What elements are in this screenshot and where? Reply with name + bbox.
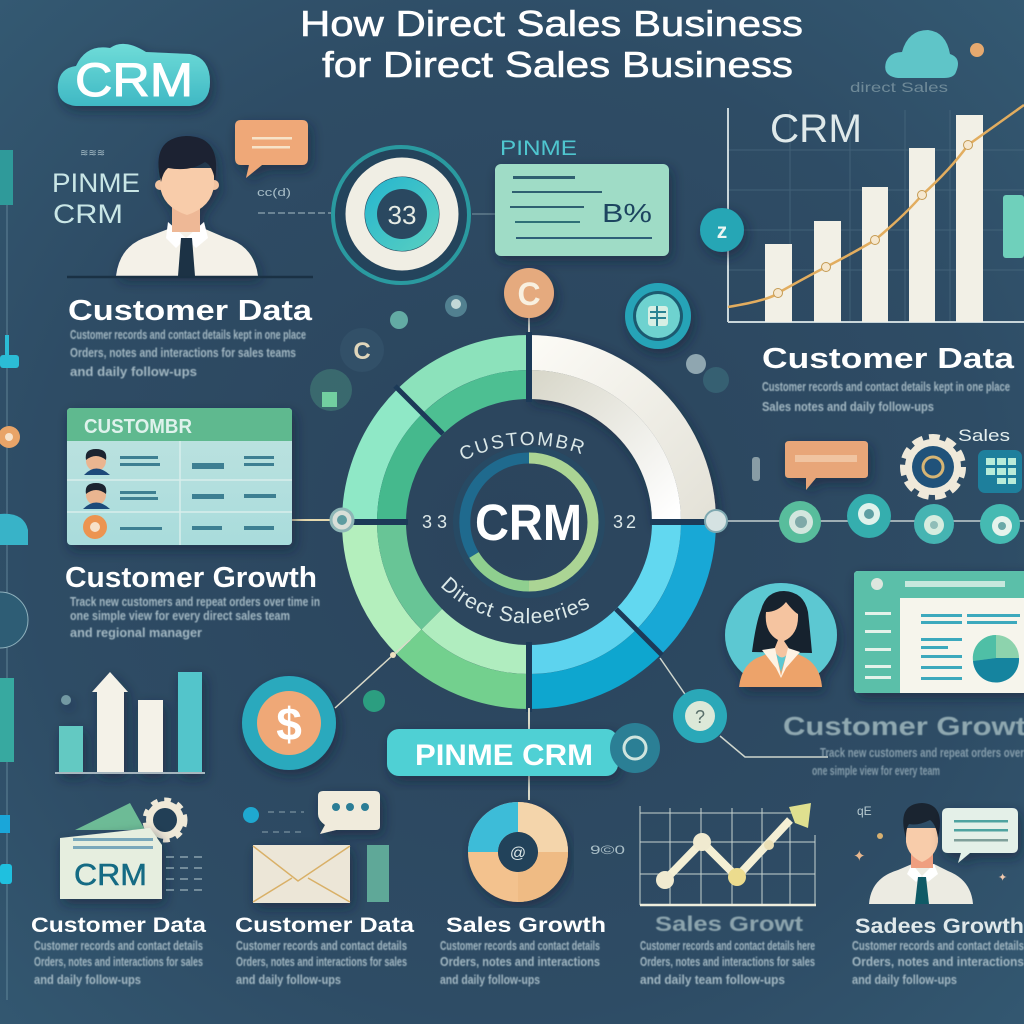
title: for Direct Sales Business: [322, 44, 793, 85]
PINME card: B%: [602, 198, 652, 228]
heading: Customer Data right: Customer Data: [762, 343, 1015, 375]
body text bottom 1: and daily follow-ups: [34, 973, 141, 987]
icon: businessman bottom right with bubble: [853, 803, 1018, 904]
icon: businessman bottom right with bubble: qE: [857, 804, 872, 818]
icon: envelope with chat bubble: [243, 791, 389, 903]
icon: CRM folder with gear: CRM: [74, 857, 147, 892]
ring: top-left green segment: [359, 352, 529, 522]
body text: customer data right: [762, 380, 1010, 414]
left edge strip of icons: [0, 150, 28, 1000]
line chart with arrow: [640, 803, 816, 905]
body text sales growth: Customer records and contact details: [440, 939, 600, 953]
body text bottom 1: [34, 939, 203, 987]
heading: Customer Data left: Customer Data: [68, 295, 313, 327]
PINME CRM label: [52, 148, 140, 229]
body text faded: [640, 939, 815, 987]
donut chart bottom: @: [510, 845, 526, 862]
PINME CRM label: ≋≋≋: [80, 148, 105, 159]
connector nodes left and right of ring: [292, 509, 1024, 532]
body text: customer data: [70, 328, 306, 379]
floating small icons: C: [353, 338, 371, 365]
body text sadees growth: and daily follow-ups: [852, 973, 957, 987]
small label beside donut: 9©0: [590, 843, 625, 857]
teal circle icon on chart axis: [700, 208, 744, 252]
teal circle icon upper right: [625, 283, 691, 349]
ring: bottom-left green segment: [359, 522, 529, 692]
PINME CRM label: CRM: [53, 199, 123, 229]
dollar coin icon: [242, 676, 336, 770]
ring numbers: [422, 512, 636, 532]
small bar chart: [55, 672, 205, 773]
inner gauge ring: [457, 450, 601, 594]
body text: customer growth: one simple view for every direct sales team: [70, 609, 290, 623]
body text sales growth: Orders, notes and interactions: [440, 955, 600, 969]
CRM cloud badge: [58, 44, 210, 106]
center label CRM: CRM: [475, 494, 582, 551]
body text: growth right: one simple view for every team: [812, 764, 940, 778]
right cluster: speech bubble, gear, sales: Sales: [958, 426, 1010, 445]
customer table card: [67, 408, 292, 545]
donut chart bottom: [483, 817, 553, 887]
body text: growth right: [812, 746, 1024, 778]
bar chart top right: [728, 105, 1024, 322]
body text: customer growth: and regional manager: [70, 626, 202, 640]
body text: customer data right: Sales notes and daily follow-ups: [762, 400, 934, 414]
icon: businessman bottom right with bubble: ✦: [853, 848, 866, 865]
body text bottom 2: Orders, notes and interactions for sales: [236, 955, 407, 969]
customer table card: CUSTOMBR: [84, 416, 193, 438]
body text sales growth: and daily follow-ups: [440, 973, 540, 987]
teal card at right edge: [1003, 195, 1024, 258]
connector dollar to ring: [335, 640, 410, 712]
title: How Direct Sales Business: [300, 3, 803, 44]
PINME CRM pill: PINME CRM: [415, 739, 593, 772]
dollar coin icon: $: [276, 698, 302, 750]
body text bottom 2: [236, 939, 407, 987]
icon: businessman: [116, 136, 258, 276]
node circles on right line: [779, 494, 1020, 544]
ring: bottom-right blue segment: [529, 522, 698, 692]
PINME CRM label: PINME: [52, 168, 140, 198]
teal circle icon on chart axis: z: [717, 220, 727, 243]
body text: customer growth: [70, 595, 320, 640]
body text: customer data: Orders, notes and interactions for sales teams: [70, 346, 296, 360]
body text faded: Customer records and contact details here: [640, 939, 815, 953]
right cluster: speech bubble, gear, sales: [752, 426, 1022, 495]
ring numbers: 33: [422, 512, 447, 532]
body text bottom 2: Customer records and contact details: [236, 939, 407, 953]
body text bottom 1: Orders, notes and interactions for sales: [34, 955, 203, 969]
baseline under businessman: [67, 276, 313, 278]
connector question circle: [660, 658, 828, 757]
PINME CRM pill: [387, 708, 660, 800]
cloud icon top right: [850, 30, 984, 95]
body text: customer data: and daily follow-ups: [70, 365, 197, 379]
donut gauge icon: 33: [388, 200, 416, 230]
heading: Sadees Growth: Sadees Growth: [855, 915, 1024, 938]
body text bottom 2: and daily follow-ups: [236, 973, 341, 987]
body text: customer data: Customer records and contact details kept in one place: [70, 328, 306, 342]
bar chart top right: CRM: [770, 107, 862, 151]
CRM cloud badge: CRM: [75, 53, 193, 106]
cloud icon top right: direct Sales: [850, 79, 948, 95]
connector from businessman to gauge: [258, 212, 331, 214]
ring: top-right white segment: [529, 352, 698, 522]
curved label direct sales: Direct Saleeries: [441, 576, 589, 624]
body text: customer growth: Track new customers and repeat orders over time in: [70, 595, 320, 609]
curved label customer: CUSTOMBR: [460, 432, 584, 459]
body text faded: and daily team follow-ups: [640, 973, 785, 987]
icon: businessman bottom right with bubble: ✦: [998, 872, 1007, 884]
donut gauge icon: [333, 147, 469, 283]
ring numbers: 32: [613, 512, 636, 532]
heading: Customer Data bottom 1: Customer Data: [31, 914, 206, 937]
connector question circle: ?: [695, 707, 705, 727]
body text bottom 1: Customer records and contact details: [34, 939, 203, 953]
floating small icons: [310, 295, 729, 411]
connector top node: C: [517, 276, 541, 312]
icon: CRM folder with gear: [60, 801, 203, 899]
dashboard card right: [854, 571, 1024, 693]
icon: woman avatar: [725, 583, 837, 687]
speech bubble orange: [235, 120, 308, 178]
PINME card: [472, 137, 669, 256]
connector top node: [504, 268, 554, 336]
PINME card: PINME: [500, 137, 577, 160]
heading: Customer Data bottom 2: Customer Data: [235, 914, 414, 937]
central CRM ring chart: [342, 332, 723, 712]
heading: Sales Growth bottom: Sales Growth: [446, 914, 606, 937]
body text sales growth: [440, 939, 600, 987]
heading: Customer Growth left: Customer Growth: [65, 562, 317, 594]
body text faded: Orders, notes and interactions for sales: [640, 955, 815, 969]
title: [300, 3, 803, 85]
body text sadees growth: [852, 939, 1024, 987]
heading: Customer Growth faded: Customer Growt: [783, 711, 1024, 741]
heading: Sales Growth faded: Sales Growt: [655, 913, 803, 936]
small note near bubble: cc(d): [257, 187, 291, 199]
